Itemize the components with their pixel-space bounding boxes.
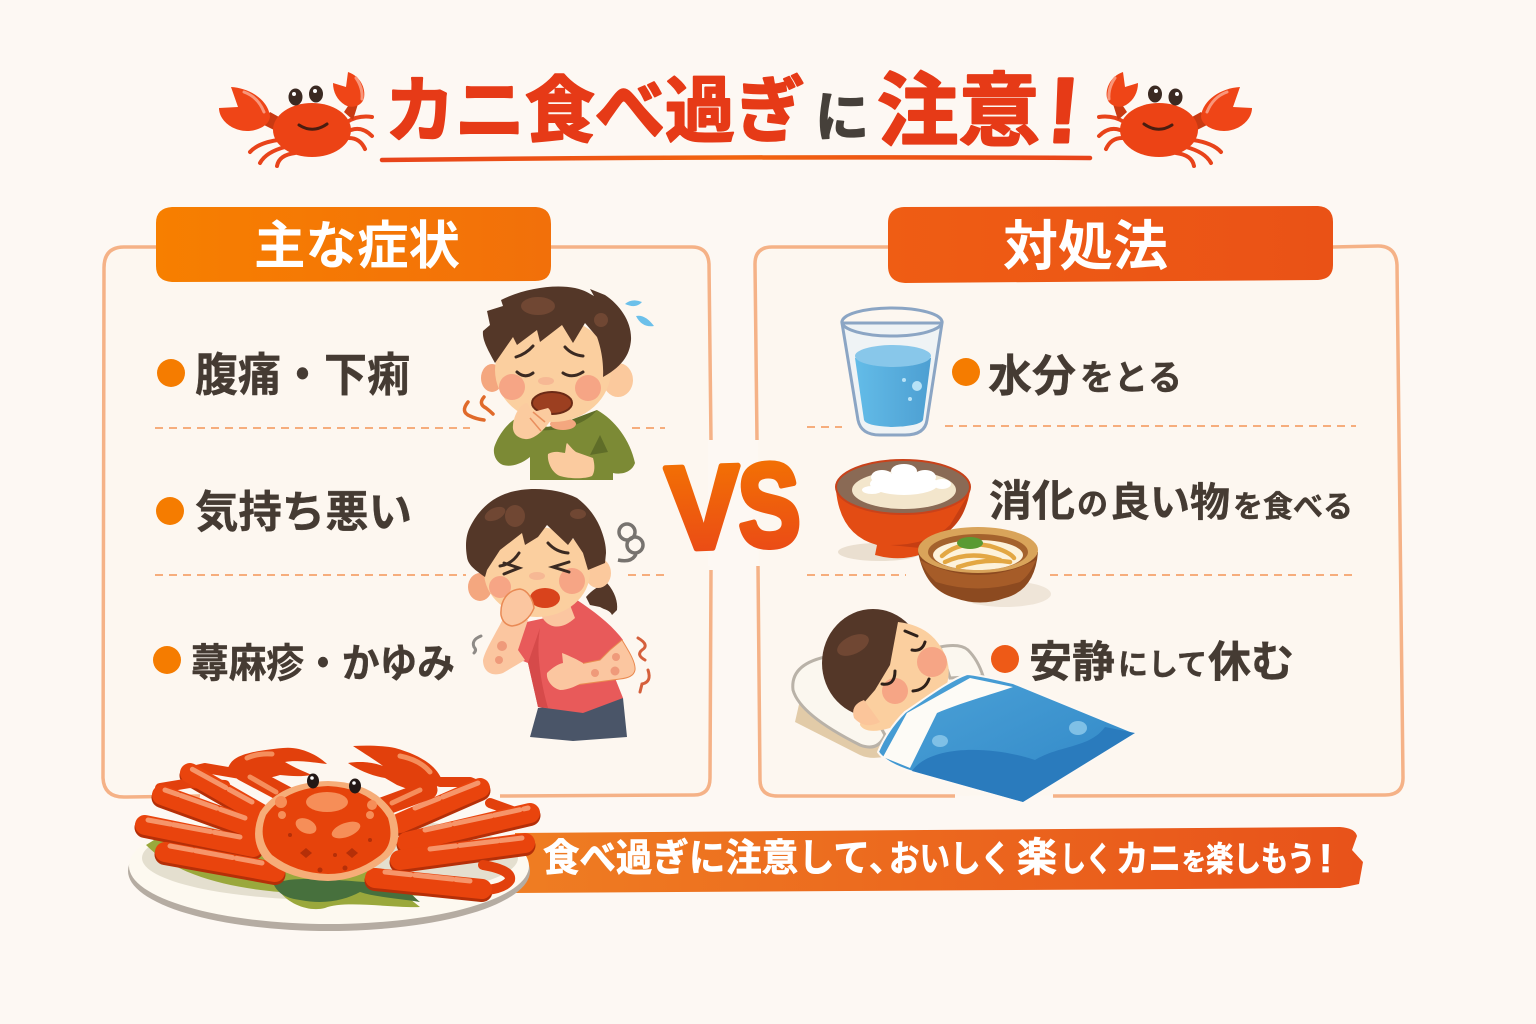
list item: 蕁麻疹・かゆみ: 蕁麻疹・かゆみ — [191, 631, 455, 689]
list item: 消化の良い物を食べる: の — [1077, 479, 1108, 524]
sweat drops — [625, 300, 654, 326]
illustration: crab on plate — [128, 746, 530, 931]
list item: 消化の良い物を食べる: を — [1233, 482, 1263, 526]
illustration: girl with hives — [466, 489, 649, 741]
garnish — [146, 830, 470, 909]
illustration: boy with stomach ache — [464, 286, 654, 480]
banner: ! — [1319, 837, 1332, 881]
hands — [513, 403, 551, 439]
banner: 楽 — [1017, 825, 1057, 883]
list item: 消化の良い物を食べる: 消化 — [989, 467, 1075, 529]
list item: 消化の良い物を食べる — [989, 467, 1353, 529]
mouth — [532, 392, 572, 414]
title text: 注意: 注意 — [877, 47, 1040, 163]
list item: 安静にして休む — [991, 628, 1294, 690]
illustration: glass of water — [842, 308, 942, 435]
list item: 消化の良い物を食べる: 良い物 — [1110, 470, 1230, 528]
title — [219, 47, 1252, 166]
title text: カニ食べ過ぎ: カニ食べ過ぎ — [385, 52, 805, 157]
hair — [466, 489, 606, 577]
list item: 水分をとる: 水分 — [988, 340, 1076, 404]
vs mark — [664, 439, 802, 575]
dizzy swirl — [618, 524, 643, 561]
legs — [145, 768, 530, 892]
heading tab: 主な症状: 主な症状 — [254, 204, 460, 279]
shirt — [494, 410, 635, 480]
list item: 安静にして休む: 安静 — [1029, 628, 1115, 690]
list item: 安静にして休む: 休む — [1208, 628, 1294, 690]
banner: 、 — [869, 832, 903, 881]
list item: 水分をとる — [952, 340, 1182, 404]
right arm — [575, 640, 635, 685]
hair — [822, 609, 924, 717]
hair — [483, 286, 631, 377]
illustration: child resting in bed — [793, 609, 1135, 803]
eyes — [307, 774, 319, 788]
title underline — [382, 157, 1090, 160]
itch marks — [638, 638, 649, 692]
plate — [128, 811, 530, 931]
face — [860, 622, 949, 731]
list item: 安静にして休む: にして — [1118, 640, 1207, 684]
list item: 気持ち悪い: 気持ち悪い — [195, 476, 412, 540]
left claw — [228, 748, 327, 797]
list item: 消化の良い物を食べる: 食べる — [1263, 482, 1353, 526]
left arm — [483, 615, 528, 674]
banner: カニ — [1116, 830, 1181, 882]
list item: 腹痛・下痢: 腹痛・下痢 — [195, 339, 410, 405]
right claw — [348, 746, 441, 807]
illustration: udon bowl — [918, 527, 1051, 607]
title text: exclamation: ! — [1045, 59, 1082, 162]
vs mark: V — [664, 441, 742, 575]
shorts — [530, 698, 627, 741]
nausea marks — [464, 397, 493, 420]
vs mark: S — [736, 439, 802, 573]
panel: remedies — [755, 202, 1403, 796]
illustration: rice bowl — [836, 460, 970, 561]
heading tab: 対処法: 対処法 — [1003, 202, 1168, 281]
heading tab: 主な症状 — [156, 204, 551, 282]
title text: に: に — [815, 73, 869, 152]
face — [495, 318, 611, 422]
banner: 楽しもう — [1206, 832, 1315, 881]
blanket — [878, 674, 1135, 803]
hand over mouth — [501, 589, 534, 626]
shell — [255, 781, 398, 881]
icon: left crab — [219, 72, 372, 166]
banner: 食べ過ぎに注意して — [543, 827, 870, 882]
banner: おいしく — [889, 830, 1011, 882]
list item: 水分をとる: をとる — [1080, 350, 1182, 401]
ponytail — [586, 583, 617, 615]
shirt — [513, 600, 623, 713]
banner: を — [1182, 842, 1206, 877]
face — [484, 527, 590, 617]
heading tab: 対処法 — [888, 202, 1333, 283]
pillow — [793, 657, 885, 747]
banner — [515, 825, 1363, 893]
panel: symptoms — [103, 204, 711, 797]
icon: right crab — [1099, 72, 1252, 166]
banner: しく — [1060, 832, 1112, 881]
neck — [540, 605, 575, 627]
mouth — [530, 588, 560, 608]
